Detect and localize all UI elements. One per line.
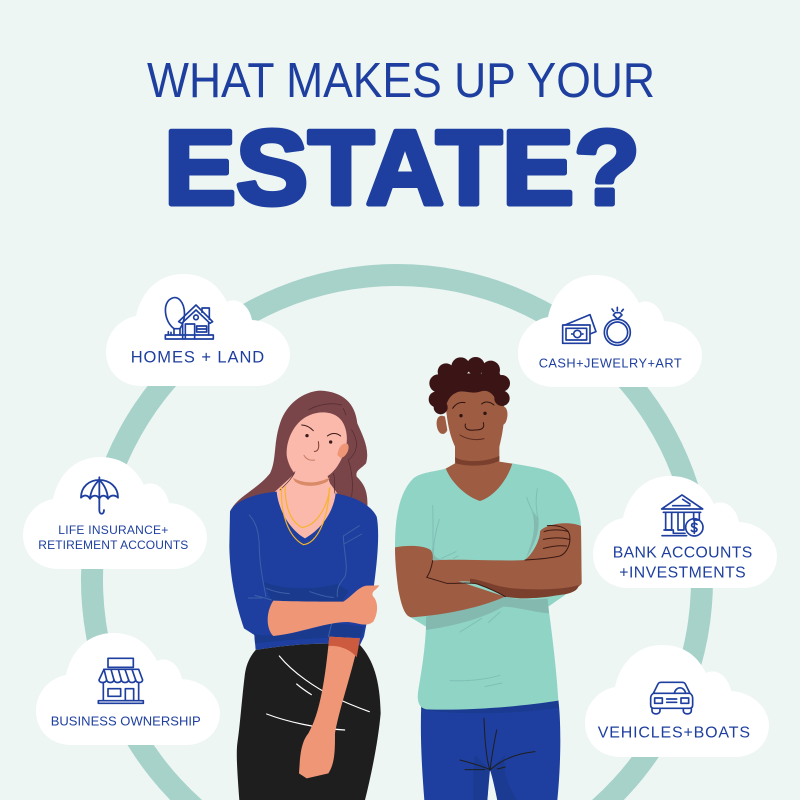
icon: car xyxy=(651,682,693,714)
figure: man xyxy=(395,357,582,800)
cloud xyxy=(593,476,777,588)
label: +INVESTMENTS xyxy=(619,564,746,581)
cloud xyxy=(23,457,207,569)
hair xyxy=(429,357,510,414)
neck shadow man xyxy=(455,456,499,466)
jeans xyxy=(421,700,560,800)
panel: vehicles and boats xyxy=(585,645,769,757)
icon: storefront xyxy=(98,658,143,703)
label: LIFE INSURANCE+ xyxy=(58,523,168,537)
jeans shadows xyxy=(421,701,558,800)
cloud xyxy=(585,645,769,757)
panel: life insurance and retirement xyxy=(23,457,207,569)
necklaces xyxy=(281,486,330,545)
ear xyxy=(337,443,349,458)
label: BANK ACCOUNTS xyxy=(613,544,752,561)
blue top xyxy=(229,492,378,650)
arm outlines xyxy=(427,526,570,597)
face xyxy=(445,383,504,462)
face details xyxy=(280,404,356,497)
chest and neck xyxy=(275,473,337,543)
ear left xyxy=(437,416,447,434)
skirt xyxy=(237,644,381,800)
icon: umbrella xyxy=(81,477,118,514)
cloud xyxy=(36,633,220,745)
neck shadow xyxy=(293,477,330,486)
left arm xyxy=(395,546,505,617)
title: what makes up your: WHAT MAKES UP YOUR xyxy=(147,53,655,108)
icon: house and tree xyxy=(165,298,213,339)
label xyxy=(38,523,188,552)
label: BUSINESS OWNERSHIP xyxy=(51,714,201,729)
skirt creases xyxy=(267,656,369,730)
shirt creases xyxy=(433,489,538,687)
label: HOMES + LAND xyxy=(131,349,264,367)
jeans creases xyxy=(460,718,535,771)
label: RETIREMENT ACCOUNTS xyxy=(38,538,188,552)
figure: woman xyxy=(229,391,381,800)
shirt shadows xyxy=(426,510,549,630)
cloud xyxy=(106,274,290,386)
icon: bank with dollar coin xyxy=(662,495,703,536)
forearm shadow xyxy=(470,579,579,598)
sleeve shadow on arm xyxy=(328,637,360,657)
label xyxy=(613,544,752,581)
icon: banknotes and ring xyxy=(563,307,630,345)
hair xyxy=(230,391,367,513)
ear right xyxy=(500,406,507,425)
face xyxy=(287,412,347,482)
label: CASH+JEWELRY+ART xyxy=(539,355,682,370)
panel: bank accounts and investments xyxy=(593,476,777,588)
label: VEHICLES+BOATS xyxy=(598,725,750,742)
right arm and hand xyxy=(432,523,582,598)
folded forearm and hand xyxy=(268,585,379,636)
face details man xyxy=(453,402,494,440)
top creases xyxy=(248,515,362,637)
ring behind the figures xyxy=(81,264,713,800)
title: estate: ESTATE? xyxy=(164,109,640,227)
panel: business ownership xyxy=(36,633,220,745)
panel: cash jewelry art xyxy=(518,275,702,387)
neck xyxy=(427,443,530,523)
t-shirt xyxy=(395,463,582,710)
lower arm xyxy=(299,637,360,778)
top shadows xyxy=(254,582,364,643)
cloud xyxy=(518,275,702,387)
panel: homes and land xyxy=(106,274,290,386)
